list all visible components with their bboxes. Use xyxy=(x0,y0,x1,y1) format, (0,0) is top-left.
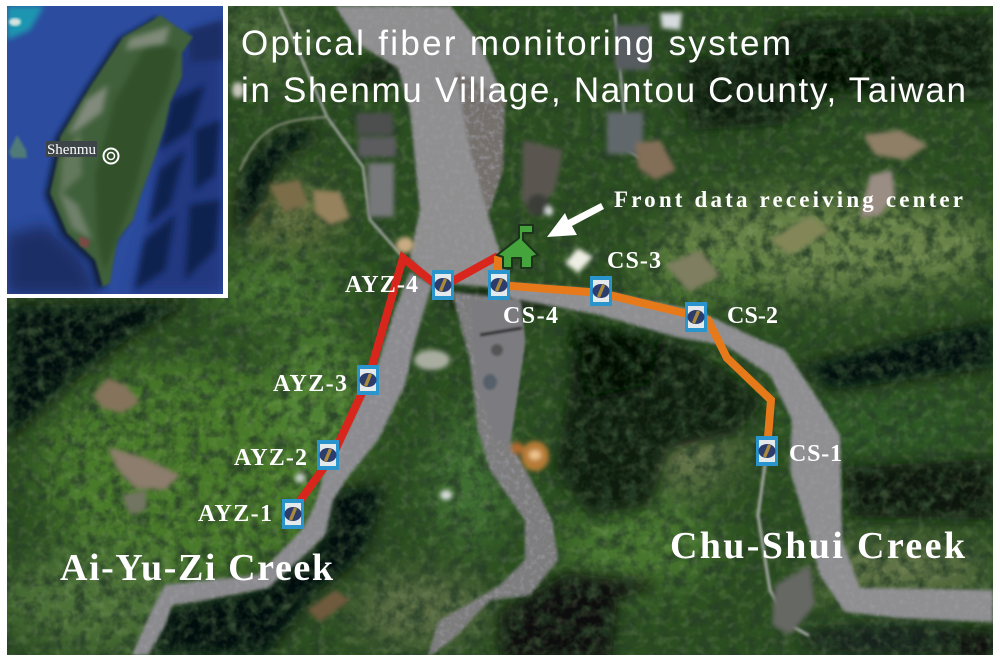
west creek, Ai-Yu-Zi xyxy=(132,272,432,655)
station: AYZ-3 xyxy=(273,365,379,397)
route: Ai-Yu-Zi Creek optical fiber (red) xyxy=(297,256,498,505)
title: in Shenmu Village, Nantou County, Taiwan xyxy=(241,71,966,110)
station: CS-1 xyxy=(756,436,842,467)
station: AYZ-1: AYZ-1 xyxy=(198,501,272,527)
label: Chu-Shui Creek: Chu-Shui Creek xyxy=(670,525,966,567)
station: CS-3 xyxy=(590,248,661,306)
station: AYZ-2 xyxy=(234,440,339,471)
central south branch xyxy=(428,292,558,657)
station: AYZ-4 xyxy=(345,270,454,300)
title: Optical fiber monitoring system xyxy=(241,24,791,63)
arrow: to front data receiving center xyxy=(547,203,604,237)
east creek, Chu-Shui xyxy=(500,282,993,622)
Taiwan island shadow xyxy=(42,14,158,291)
title xyxy=(241,24,966,110)
station: CS-4: CS-4 xyxy=(503,303,558,329)
settling ponds in central river xyxy=(470,300,525,440)
station: CS-3: CS-3 xyxy=(607,248,661,274)
Penghu islands xyxy=(9,135,27,158)
route: Chu-Shui Creek optical fiber (orange) xyxy=(498,256,771,450)
station: AYZ-1 xyxy=(198,499,304,529)
icon: data center house xyxy=(497,225,538,268)
label: front data receiving center: Front data receiving center xyxy=(614,187,963,212)
station: AYZ-2: AYZ-2 xyxy=(234,445,307,471)
thin roads xyxy=(240,8,808,635)
main river, north branch xyxy=(335,6,505,288)
label: Ai-Yu-Zi Creek: Ai-Yu-Zi Creek xyxy=(60,547,334,589)
inset map: Taiwan locator xyxy=(5,4,228,298)
station: CS-1: CS-1 xyxy=(789,441,842,467)
station: AYZ-3: AYZ-3 xyxy=(273,371,347,397)
inset sea xyxy=(7,6,223,294)
station: CS-2: CS-2 xyxy=(727,303,778,329)
Taiwan island xyxy=(50,15,193,287)
terraces, villages and clearings xyxy=(93,13,928,635)
station: AYZ-4: AYZ-4 xyxy=(345,272,418,298)
location label: Shenmu xyxy=(47,142,96,158)
location target marker xyxy=(104,148,118,164)
station: CS-2 xyxy=(685,302,778,332)
station: CS-4 xyxy=(488,270,558,329)
